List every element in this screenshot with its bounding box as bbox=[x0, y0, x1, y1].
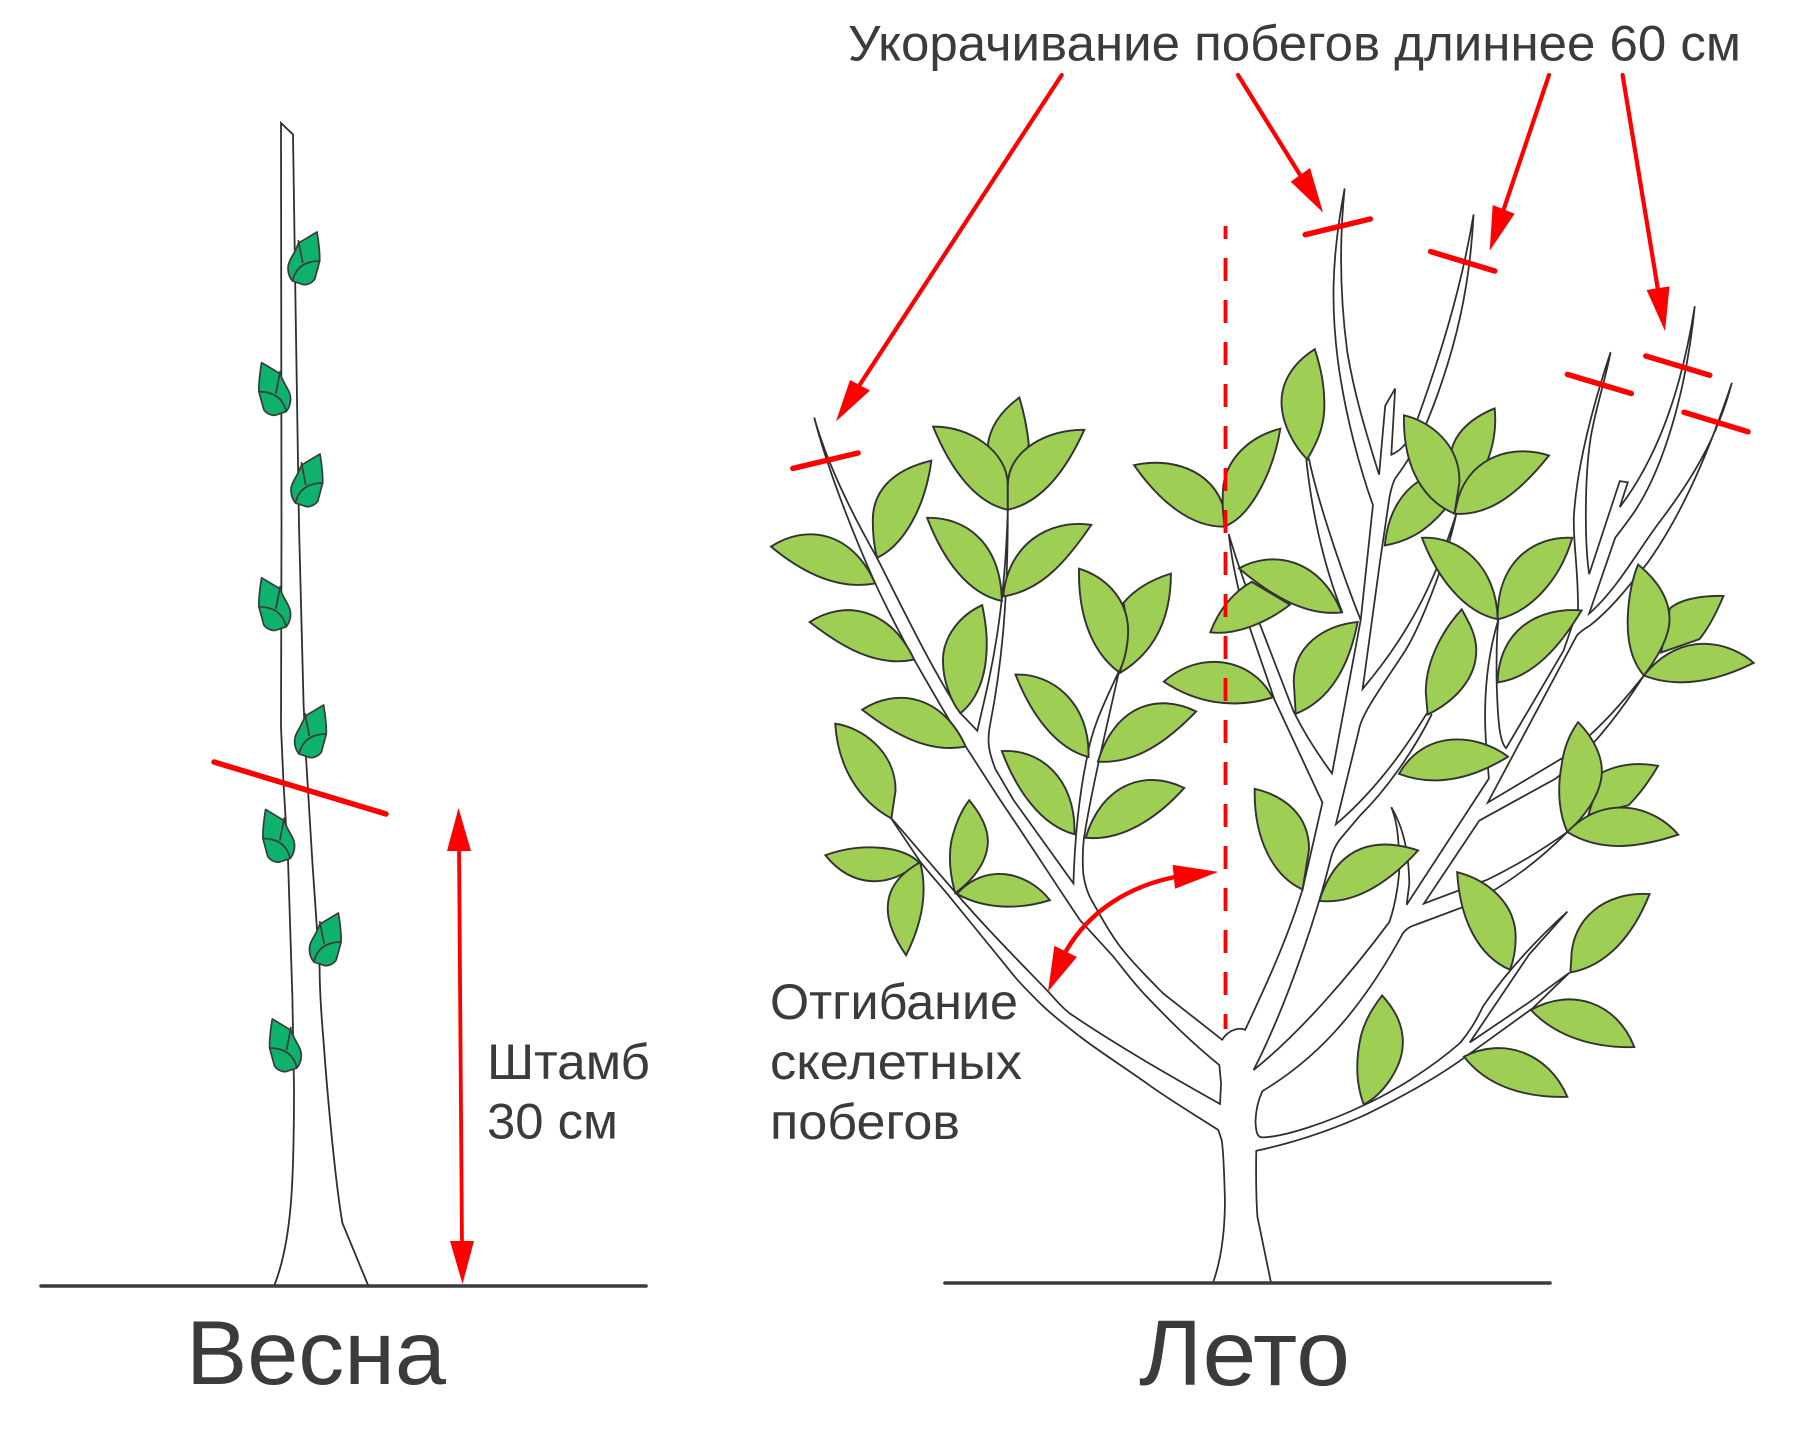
left branches and trunk edge bbox=[814, 418, 1225, 1281]
bud 4 bbox=[259, 578, 291, 630]
heading: summer: Лето bbox=[1139, 1301, 1350, 1405]
ground line: summer bbox=[945, 1281, 1550, 1285]
bud 6 bbox=[263, 810, 295, 862]
arrow: to upper right shoot bbox=[1490, 75, 1549, 251]
bud 3 bbox=[291, 454, 323, 507]
left half of the tree bbox=[771, 398, 1273, 1281]
right branches and trunk edge bbox=[1222, 188, 1732, 1282]
sapling trunk bbox=[274, 123, 368, 1285]
right half of the tree bbox=[1210, 188, 1754, 1282]
label: bending skeletal shoots: побегов bbox=[770, 1094, 960, 1150]
red cut mark on sapling bbox=[214, 762, 386, 814]
bud 7 bbox=[309, 913, 341, 966]
arrow: to far right shoots bbox=[1623, 75, 1670, 331]
double arrow: trunk height bbox=[447, 808, 474, 1284]
label: bending skeletal shoots: Отгибание bbox=[770, 974, 1018, 1030]
arrow: to left shoot bbox=[836, 75, 1062, 421]
ground line: spring bbox=[41, 1284, 646, 1288]
bud 8 bbox=[270, 1019, 301, 1072]
heading: spring: Весна bbox=[186, 1303, 446, 1404]
red dashed vertical axis bbox=[1224, 226, 1227, 1029]
panel: summer tree bbox=[770, 16, 1754, 1405]
arrow: to centre shoot bbox=[1238, 75, 1323, 212]
left leaves bbox=[771, 398, 1273, 955]
label: trunk height: 30 см bbox=[487, 1094, 618, 1150]
right leaves bbox=[1210, 349, 1754, 1104]
red cut marks on shoots bbox=[793, 219, 1748, 468]
label: shortening shoots: Укорачивание побегов длиннее 60 см bbox=[848, 16, 1741, 72]
label: bending skeletal shoots: скелетных bbox=[770, 1034, 1022, 1090]
panel: spring sapling bbox=[41, 123, 650, 1404]
curved double arrow: bending angle bbox=[1048, 865, 1218, 992]
bud 5 bbox=[295, 705, 326, 758]
label: trunk height: Штамб bbox=[487, 1034, 650, 1090]
bud 2 bbox=[259, 363, 291, 415]
bud 1 bbox=[288, 232, 320, 285]
